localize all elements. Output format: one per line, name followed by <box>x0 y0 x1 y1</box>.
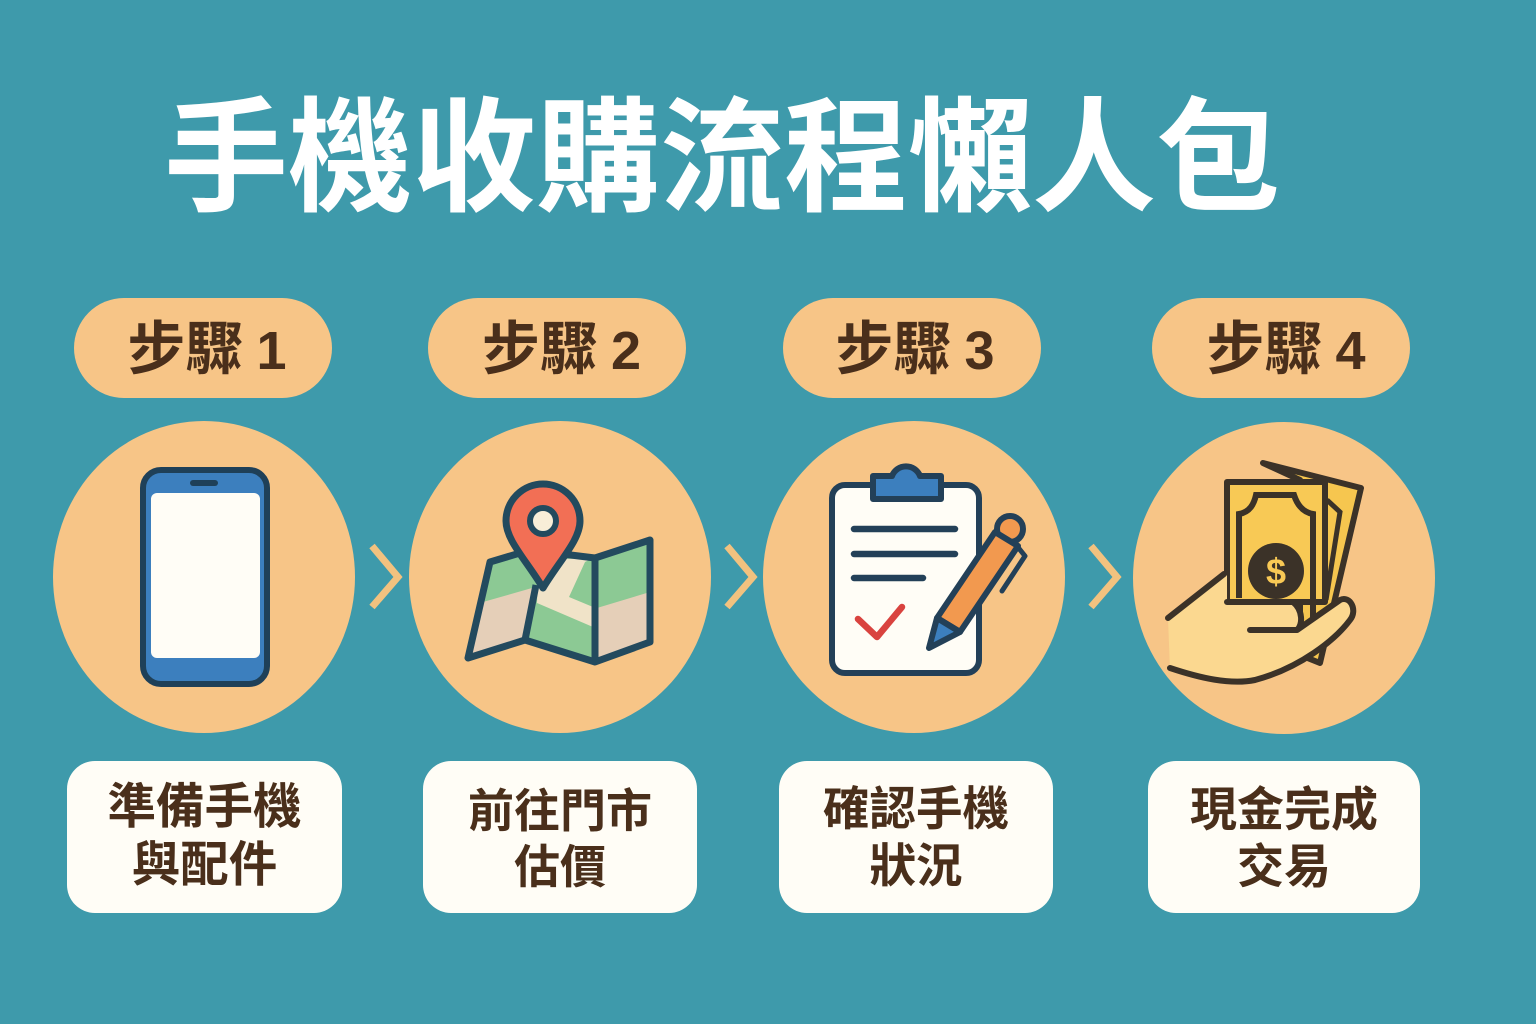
card 1: 與配件 <box>132 838 277 892</box>
step 4 pill: 步驟 4 <box>1206 317 1366 382</box>
arrow 2 <box>727 546 753 607</box>
circle 4 with money icon <box>1133 422 1435 734</box>
card 1: 準備手機 <box>107 780 302 834</box>
step 3 pill <box>783 298 1041 398</box>
dollar sign: $ <box>1266 551 1286 592</box>
card 2: 前往門市 <box>468 785 652 837</box>
card 3: 狀況 <box>870 840 962 892</box>
circle 3 with clipboard icon <box>763 421 1065 733</box>
step 4 pill <box>1152 298 1410 398</box>
card 1 <box>67 761 342 913</box>
step 2 pill: 步驟 2 <box>482 317 641 382</box>
card 4 <box>1148 761 1420 913</box>
step 2 pill <box>428 298 686 398</box>
arrow 3 <box>1091 546 1117 607</box>
arrow 1 <box>372 546 398 607</box>
card 4: 交易 <box>1237 840 1331 893</box>
step 1 pill <box>74 298 332 398</box>
step 3 pill: 步驟 3 <box>835 317 995 382</box>
card 4: 現金完成 <box>1190 783 1378 836</box>
title: 手機收購流程懶人包 <box>164 90 1280 228</box>
card 2 <box>423 761 697 913</box>
card 3: 確認手機 <box>823 783 1009 835</box>
step 1 pill: 步驟 1 <box>127 317 287 382</box>
circle 1 with phone icon <box>53 421 355 733</box>
card 2: 估價 <box>514 841 606 893</box>
circle 2 with map icon <box>409 421 711 733</box>
card 3 <box>779 761 1053 913</box>
